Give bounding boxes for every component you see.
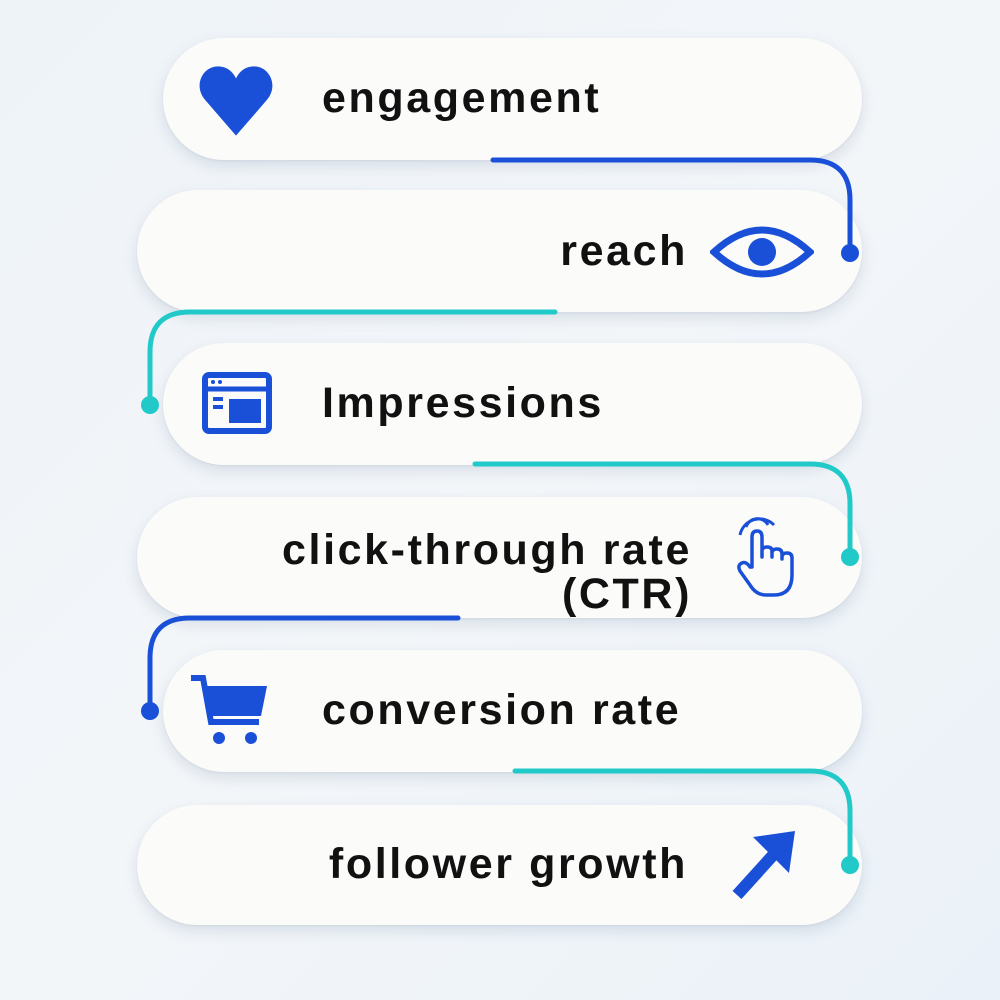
text: Impressions: Impressions	[322, 379, 604, 427]
connector: CTR to conversion	[141, 618, 458, 720]
panel: reach	[137, 190, 862, 312]
panel: impressions	[163, 343, 862, 465]
connector: engagement to reach	[493, 160, 859, 262]
icon: browser window	[202, 372, 272, 434]
connector: reach to impressions	[141, 312, 555, 414]
icon: eye	[710, 226, 814, 278]
connector: conversion to follower growth	[515, 771, 859, 874]
text: click-through rate (CTR): click-through rate	[282, 526, 692, 574]
icon: shopping cart	[191, 675, 267, 744]
icon: heart	[200, 66, 272, 136]
icon: arrow up-right	[732, 831, 795, 899]
icon: hand pointer	[737, 517, 794, 597]
text: click-through rate (CTR): (CTR)	[562, 570, 692, 618]
text: follower growth: follower growth	[329, 840, 688, 888]
panel: engagement	[163, 38, 862, 160]
text: reach: reach	[560, 227, 688, 275]
panel: CTR	[137, 497, 862, 618]
text: click-through rate (CTR)	[282, 526, 692, 618]
panel: follower growth	[137, 805, 862, 925]
connector: impressions to CTR	[475, 464, 859, 566]
text: conversion rate: conversion rate	[322, 686, 681, 734]
panel: conversion rate	[163, 650, 862, 772]
text: engagement: engagement	[322, 74, 601, 122]
